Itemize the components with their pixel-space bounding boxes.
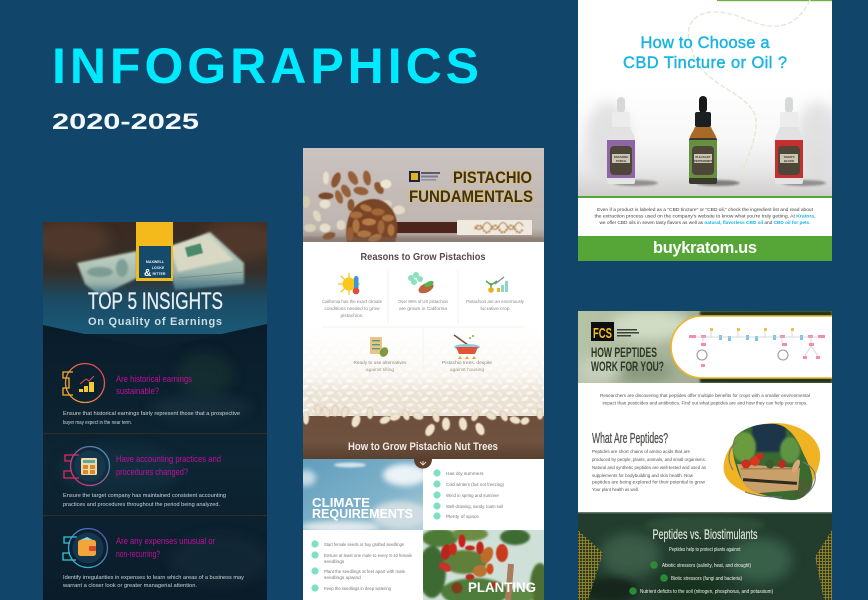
item 3: expenses [62, 528, 244, 589]
icon: sun and thermometer [338, 273, 360, 295]
item 3: expenses: Identify irregularities in expenses to learn which areas of a business may [63, 575, 244, 581]
intro text: impact than pesticides and antibiotics. Find out what peptides are and how they can help your crops. [602, 400, 808, 406]
bean texture [303, 360, 544, 416]
section: Peptides vs. Biostimulants: Peptides help to protect plants against: [669, 547, 741, 553]
footer band [578, 236, 832, 261]
checklist: planting: Keep the seedlings in deep watering [324, 586, 391, 592]
caption texts: Pistachio trees, despite [442, 360, 492, 366]
logo: Maxwell Locke & Ritter: MAXWELL [146, 260, 165, 264]
caption texts: conditions needed to grow [324, 306, 380, 312]
caption texts [322, 299, 524, 373]
photo backdrop [578, 99, 832, 196]
heading: CBD Tincture or Oil ? [623, 54, 787, 72]
bullet: biotic stressors: Biotic stressors (fungi and bacteria) [671, 576, 742, 582]
section: Peptides vs. Biostimulants: Peptides vs. Biostimulants [652, 526, 758, 542]
caption texts: California has the exact climate [322, 299, 382, 305]
bullet: abiotic stressors: Abiotic stressors (salinity, heat, and drought) [662, 563, 751, 569]
heading: How Peptides Work For You: HOW PEPTIDES [591, 344, 657, 360]
body text: Even if a product is labeled as a "CBD tincture" or "CBD oil," check the ingredient list and read about [597, 207, 814, 213]
intro text [600, 393, 810, 406]
bottle: paradise punch: PARADISE [614, 155, 628, 159]
item 3: expenses: non-recurring? [116, 549, 160, 560]
checklist: climate: Has dry summers [446, 471, 484, 477]
item 2: accounting practices [63, 446, 226, 508]
checklist: climate: Wind in spring and summer [446, 493, 499, 499]
body: What Are Peptides: produced by people, plants, animals, and small organisms. [592, 457, 706, 463]
checklist: planting: seedlings [324, 559, 345, 565]
caption texts: lucrative crop [480, 306, 510, 312]
icon: plant and growth bars [486, 277, 508, 293]
bottle: paradise punch [607, 97, 658, 186]
item 1: historical earnings [63, 364, 240, 426]
title: INFOGRAPHICS [52, 38, 479, 94]
icon: tab with sprout [414, 459, 432, 468]
checklist: climate [433, 469, 504, 520]
checklist: planting: seedlings upwind [324, 575, 361, 581]
logo: FCS [591, 322, 639, 342]
icon: checklist [370, 337, 388, 357]
logo [409, 171, 440, 182]
caption texts: Pistachios are an enormously [466, 299, 524, 305]
caption texts: Ready to use alternatives [354, 360, 407, 366]
top accent line [717, 0, 832, 1]
bullet: nutrient deficits: Nutrient deficits to the soil (nitrogen, phosphorus, and potassium) [640, 589, 773, 595]
logo: Maxwell Locke & Ritter: RITTER [153, 272, 166, 276]
bottle: pleasant peppermint: PLEASANT [695, 155, 711, 159]
panel: Pistachio Fundamentals [296, 148, 550, 600]
logo: Maxwell Locke & Ritter: LOCKE [152, 266, 165, 270]
subtitle: years: 2020-2025 [52, 109, 199, 134]
icon: bar chart in ring [63, 364, 104, 402]
checklist: climate: Well-draining, sandy, loam soil [446, 504, 503, 510]
heading: Pistachio Fundamentals: PISTACHIO [453, 169, 532, 187]
heading: Pistachio Fundamentals [409, 170, 533, 203]
header photo: cash stack [43, 222, 267, 334]
checklist: climate: Cold winters (but not freezing) [446, 482, 504, 488]
logo: FCS: FCS [593, 325, 612, 342]
icon: calculator in ring [64, 446, 110, 486]
caption texts: Over 99% of US pistachios [398, 299, 448, 305]
photo: red pistachios planting: PLANTING [468, 579, 536, 595]
bottle: pleasant peppermint: PEPPERMINT [694, 159, 712, 163]
heading: How to Choose a [640, 34, 770, 52]
panel: How to Choose a CBD Tincture or Oil [578, 0, 840, 261]
bullet: biotic stressors [660, 574, 742, 582]
footer band: buykratom.us [653, 239, 757, 257]
panel: climate requirements photo [303, 459, 423, 530]
heading: Pistachio Fundamentals: FUNDAMENTALS [409, 188, 533, 206]
bottle: tiger's blood: BLOOD [784, 159, 794, 163]
panel: climate requirements photo: CLIMATE [312, 495, 370, 510]
panel: How Peptides Work For You [578, 309, 868, 600]
wood section [303, 404, 544, 459]
spoon [396, 222, 457, 233]
heading: How Peptides Work For You: WORK FOR YOU? [591, 358, 664, 374]
icon: wallet in ring [63, 528, 108, 568]
icon: cooking pot [454, 335, 480, 359]
heading: How to Grow Pistachio Nut Trees: How to Grow Pistachio Nut Trees [348, 441, 498, 453]
body: What Are Peptides [592, 449, 706, 493]
heading [624, 36, 787, 68]
checklist: climate: Plenty of space [446, 514, 479, 520]
reason icons and captions [322, 270, 524, 373]
panel: Top 5 Insights on Quality of Earnings [43, 222, 267, 600]
caption texts: are grown in California [399, 306, 447, 312]
green divider [578, 196, 832, 198]
item 1: historical earnings: sustainable? [116, 386, 159, 397]
decorative dashed curve [689, 0, 810, 185]
body: What Are Peptides: Your plant health as well. [592, 487, 639, 493]
item 2: accounting practices: Ensure the target company has maintained consistent accounting [63, 493, 226, 499]
icon: cloud and seed [408, 272, 434, 294]
item 1: historical earnings: Ensure that historical earnings fairly represent those that a prospective [63, 411, 240, 417]
heading: Reasons to Grow Pistachios: Reasons to Grow Pistachios [360, 251, 486, 263]
item 1: historical earnings: Are historical earnings [116, 374, 192, 385]
caption texts: against housing [450, 367, 484, 373]
header photo: nuts on spoon [302, 148, 544, 244]
bottle: paradise punch: PUNCH [616, 159, 626, 163]
bullet: abiotic stressors [650, 561, 751, 569]
item 2: accounting practices: procedures changed? [116, 467, 188, 478]
item 2: accounting practices: Have accounting practices and [116, 454, 221, 465]
heading: What Are Peptides: What Are Peptides? [592, 430, 668, 447]
body: What Are Peptides: Peptides are short chains of amino acids that are [592, 449, 690, 455]
checklist: planting: Start female seeds or buy grafted seedlings [324, 542, 405, 548]
photo: red pistachios planting [423, 530, 544, 600]
dark body with chevron [43, 324, 267, 516]
logo: Maxwell Locke & Ritter: & [144, 268, 151, 279]
bullet: nutrient deficits [629, 587, 773, 595]
heading: Top 5 Insights: TOP 5 INSIGHTS [88, 288, 223, 315]
caption texts: against tilling [366, 367, 394, 373]
checklist: planting [311, 540, 412, 592]
bottle: tiger's blood [775, 97, 826, 186]
bottle: tiger's blood: TIGER'S [783, 155, 795, 159]
checklist: planting: Plant the seedlings at feet apart with male [324, 569, 405, 575]
checklist: planting: Ensure at least one male to every 8-10 female [324, 553, 412, 559]
item 2: accounting practices: practices and procedures throughout the period being analyzed. [63, 502, 220, 508]
body: What Are Peptides: peptides are being explored for their potential to grow [592, 480, 705, 486]
panel: climate requirements photo: REQUIREMENTS [312, 506, 413, 521]
body text: the extraction process used on the company's website to know what you're truly getting. At Kratora, [594, 214, 816, 220]
body: What Are Peptides: Natural and synthetic peptides are well-tested and used as [592, 465, 706, 471]
heading: How Peptides Work For You [591, 344, 664, 374]
caption texts: pistachios. [340, 313, 364, 319]
bottle: pleasant peppermint [689, 96, 740, 186]
molecule pill [671, 316, 868, 378]
photo blob: vegetable crate [724, 420, 820, 505]
logo: Maxwell Locke & Ritter [136, 222, 173, 281]
body: What Are Peptides: supplements for bodybuilding and skin health. Now [592, 473, 693, 479]
section: Peptides vs. Biostimulants [578, 512, 832, 600]
subheading: On Quality of Earnings [88, 316, 222, 328]
item 3: expenses: warrant a closer look or greater managerial attention. [62, 583, 197, 589]
header foliage [578, 309, 832, 384]
body text [594, 207, 816, 226]
item 1: historical earnings: buyer may expect in the near term. [63, 420, 132, 426]
body text: we offer CBD oils in seven tasty flavors as well as natural, flavorless CBD oil and CBD oil for pets. [600, 220, 810, 226]
intro text: Researchers are discovering that peptides offer multiple benefits for crops with a smaller environmental [600, 393, 810, 399]
item 3: expenses: Are any expenses unusual or [116, 536, 215, 547]
